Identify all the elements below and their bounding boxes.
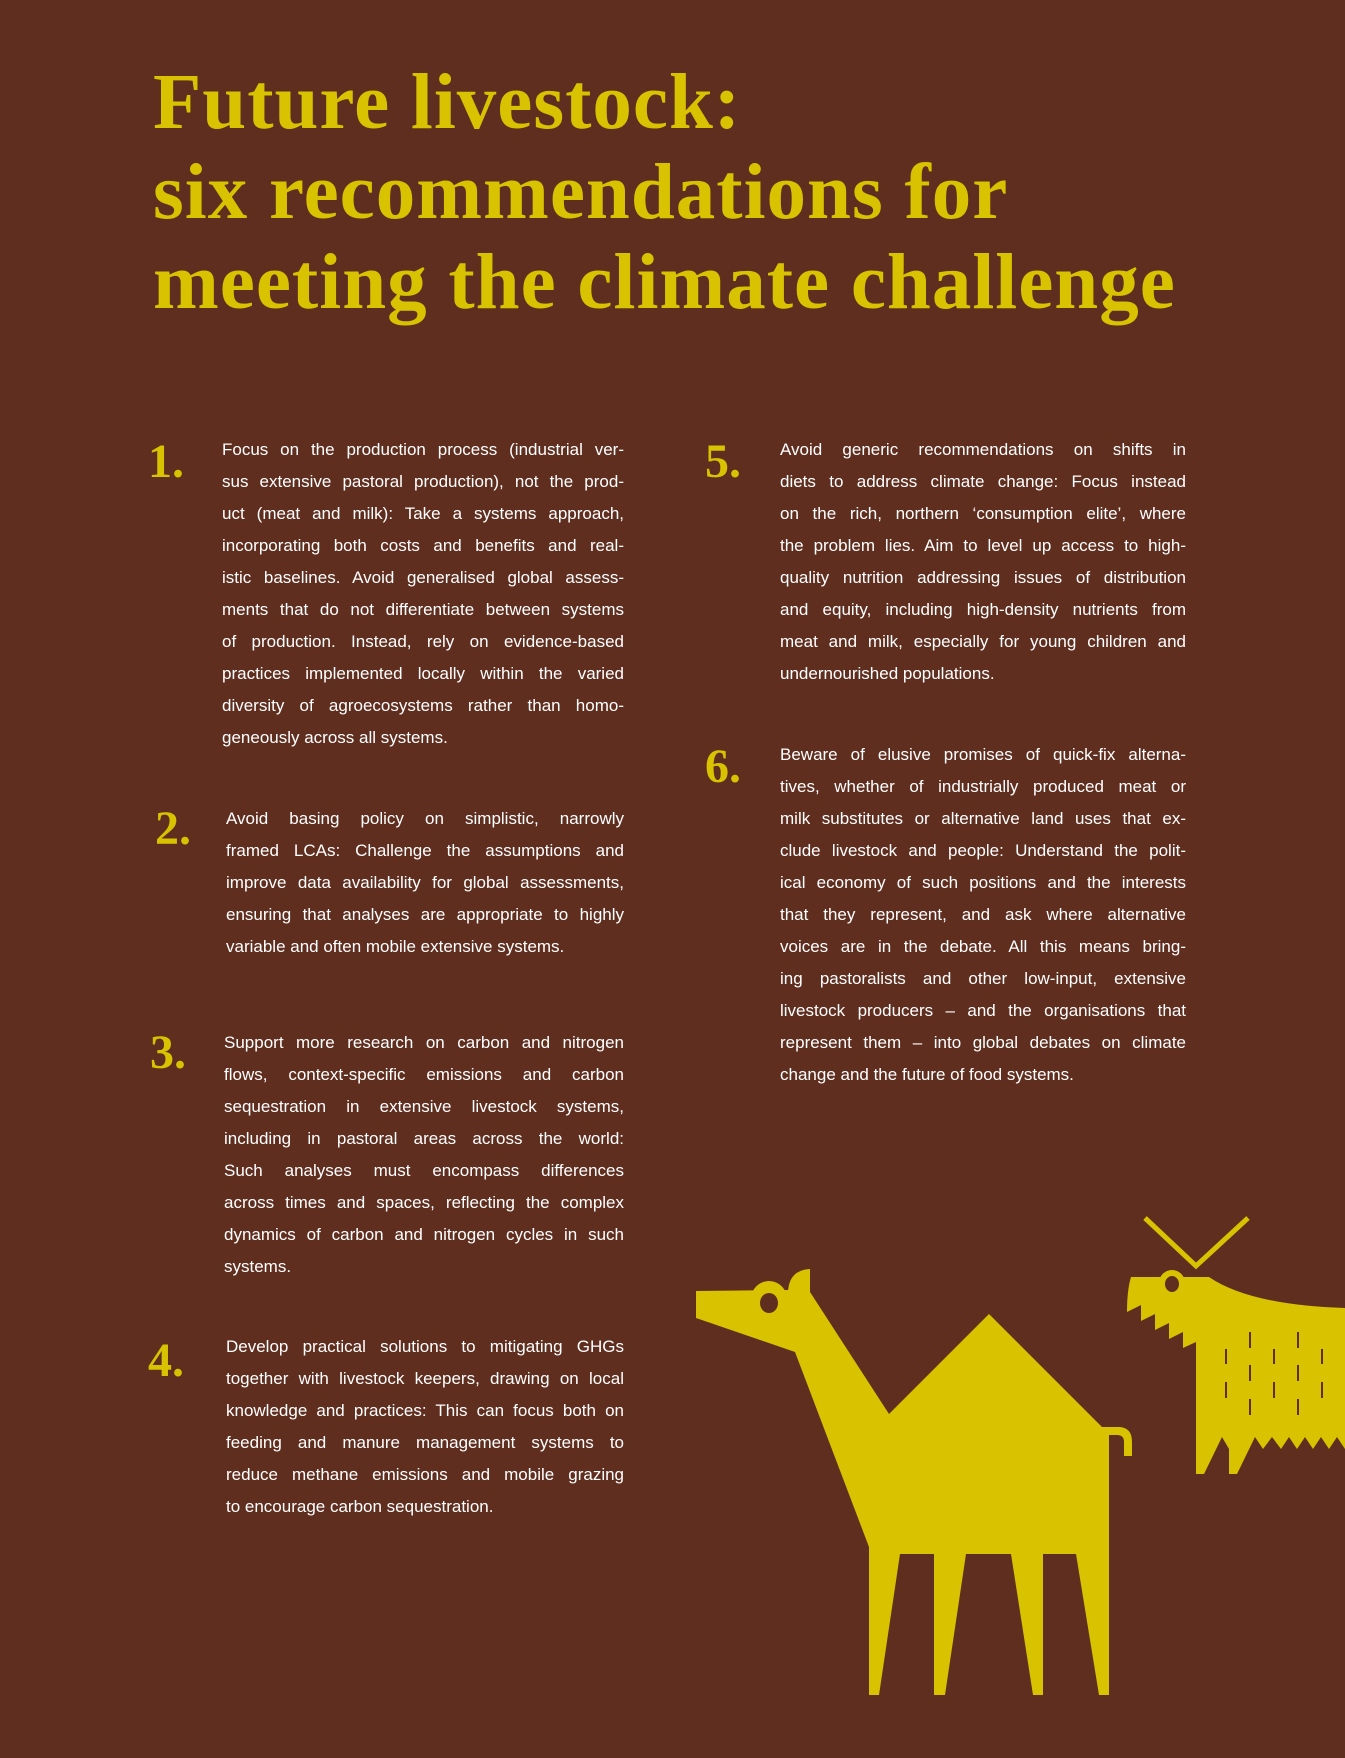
- text 6: ing pastoralists and other low-input, extensive: [780, 969, 1186, 988]
- text 6: livestock producers – and the organisations that: [780, 1001, 1186, 1020]
- text 5: Avoid generic recommendations on shifts in: [780, 440, 1186, 459]
- text 3: systems.: [224, 1257, 291, 1276]
- text 2: [226, 809, 624, 956]
- text 6: [780, 745, 1186, 1084]
- text 2: improve data availability for global assessments,: [226, 873, 624, 892]
- text 6: milk substitutes or alternative land uses that ex-: [780, 809, 1186, 828]
- text 4: together with livestock keepers, drawing on local: [226, 1369, 624, 1388]
- text 6: Beware of elusive promises of quick-fix alterna-: [780, 745, 1186, 764]
- text 3: Such analyses must encompass differences: [224, 1161, 624, 1180]
- number 1: 1.: [148, 435, 184, 488]
- text 5: undernourished populations.: [780, 664, 995, 683]
- text 5: meat and milk, especially for young children and: [780, 632, 1186, 651]
- text 6: that they represent, and ask where alternative: [780, 905, 1186, 924]
- text 3: dynamics of carbon and nitrogen cycles in such: [224, 1225, 624, 1244]
- text 6: represent them – into global debates on climate: [780, 1033, 1186, 1052]
- text 1: Focus on the production process (industrial ver-: [222, 440, 624, 459]
- text 3: including in pastoral areas across the world:: [224, 1129, 624, 1148]
- text 1: ments that do not differentiate between systems: [222, 600, 624, 619]
- text 6: clude livestock and people: Understand the polit-: [780, 841, 1186, 860]
- text 2: framed LCAs: Challenge the assumptions and: [226, 841, 624, 860]
- text 4: feeding and manure management systems to: [226, 1433, 624, 1452]
- text 1: uct (meat and milk): Take a systems approach,: [222, 504, 624, 523]
- item 3: [150, 1026, 624, 1276]
- number 2: 2.: [155, 802, 191, 855]
- number 5: 5.: [705, 435, 741, 488]
- text 5: [780, 440, 1186, 683]
- text 4: [226, 1337, 624, 1516]
- text 4: knowledge and practices: This can focus both on: [226, 1401, 624, 1420]
- text 4: reduce methane emissions and mobile grazing: [226, 1465, 624, 1484]
- text 1: diversity of agroecosystems rather than homo-: [222, 696, 624, 715]
- text 2: ensuring that analyses are appropriate to highly: [226, 905, 624, 924]
- text 1: [222, 440, 624, 747]
- text 5: quality nutrition addressing issues of distribution: [780, 568, 1186, 587]
- text 4: Develop practical solutions to mitigating GHGs: [226, 1337, 624, 1356]
- item 4: [148, 1334, 624, 1516]
- number 3: 3.: [150, 1026, 186, 1079]
- number 6: 6.: [705, 740, 741, 793]
- text 2: Avoid basing policy on simplistic, narrowly: [226, 809, 624, 828]
- text 3: flows, context-specific emissions and carbon: [224, 1065, 624, 1084]
- text 3: across times and spaces, reflecting the complex: [224, 1193, 624, 1212]
- text 6: tives, whether of industrially produced meat or: [780, 777, 1186, 796]
- text 5: on the rich, northern ‘consumption elite’, where: [780, 504, 1186, 523]
- text 1: geneously across all systems.: [222, 728, 448, 747]
- icon: yak: [1127, 1218, 1345, 1474]
- item 1: [148, 435, 624, 747]
- text 2: variable and often mobile extensive systems.: [226, 937, 564, 956]
- text 1: istic baselines. Avoid generalised global assess-: [222, 568, 624, 587]
- text 6: voices are in the debate. All this means bring-: [780, 937, 1186, 956]
- item 2: [155, 802, 624, 956]
- text 5: the problem lies. Aim to level up access to high-: [780, 536, 1186, 555]
- text 3: Support more research on carbon and nitrogen: [224, 1033, 624, 1052]
- item 6: [705, 740, 1186, 1084]
- text 5: diets to address climate change: Focus instead: [780, 472, 1186, 491]
- text 3: [224, 1033, 624, 1276]
- text 5: and equity, including high-density nutrients from: [780, 600, 1186, 619]
- number 4: 4.: [148, 1334, 184, 1387]
- text 4: to encourage carbon sequestration.: [226, 1497, 493, 1516]
- text 3: sequestration in extensive livestock systems,: [224, 1097, 624, 1116]
- text 1: sus extensive pastoral production), not the prod-: [222, 472, 624, 491]
- title: meeting the climate challenge: [153, 239, 1176, 326]
- text 1: of production. Instead, rely on evidence-based: [222, 632, 624, 651]
- title: six recommendations for: [153, 149, 1008, 236]
- text 1: incorporating both costs and benefits and real-: [222, 536, 624, 555]
- title: Future livestock:: [153, 59, 741, 146]
- title: [153, 59, 1176, 326]
- text 1: practices implemented locally within the varied: [222, 664, 624, 683]
- item 5: [705, 435, 1186, 683]
- text 6: ical economy of such positions and the interests: [780, 873, 1186, 892]
- icon: camel: [696, 1269, 1132, 1695]
- text 6: change and the future of food systems.: [780, 1065, 1074, 1084]
